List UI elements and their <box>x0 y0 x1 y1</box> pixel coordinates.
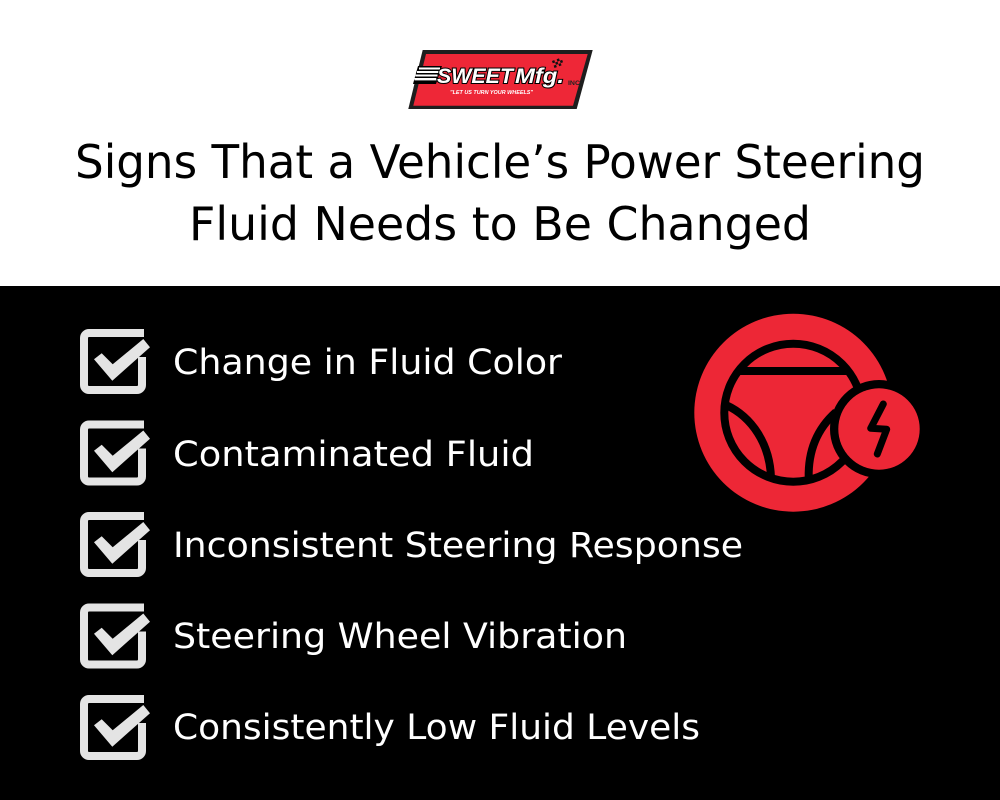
item: Steering Wheel Vibration <box>84 608 627 664</box>
icon: power bolt badge <box>830 380 928 478</box>
item: Consistently Low Fluid Levels <box>84 699 700 756</box>
item: Inconsistent Steering Response <box>84 516 743 573</box>
logo: Sweet Mfg: "LET US TURN YOUR WHEELS" <box>450 90 534 96</box>
title: Signs That a Vehicle’s Power Steering <box>75 135 925 189</box>
item: Inconsistent Steering Response: Inconsistent Steering Response <box>173 526 743 566</box>
icon: steering wheel with power bolt <box>694 314 928 512</box>
item: Change in Fluid Color: Change in Fluid Color <box>173 343 563 383</box>
title <box>75 135 925 251</box>
logo: Sweet Mfg: Mfg. <box>515 65 564 88</box>
panel: black checklist background <box>0 286 1000 800</box>
logo: Sweet Mfg <box>408 50 593 109</box>
logo: Sweet Mfg: INC <box>568 80 580 87</box>
logo: Sweet Mfg: SWEET <box>437 65 515 88</box>
item: Contaminated Fluid: Contaminated Fluid <box>173 435 534 475</box>
title: Fluid Needs to Be Changed <box>189 197 811 251</box>
checklist <box>84 333 743 756</box>
item: Consistently Low Fluid Levels: Consistently Low Fluid Levels <box>173 708 700 748</box>
item: Change in Fluid Color <box>84 333 563 390</box>
item: Steering Wheel Vibration: Steering Wheel Vibration <box>173 617 627 657</box>
item: Contaminated Fluid <box>84 424 534 482</box>
